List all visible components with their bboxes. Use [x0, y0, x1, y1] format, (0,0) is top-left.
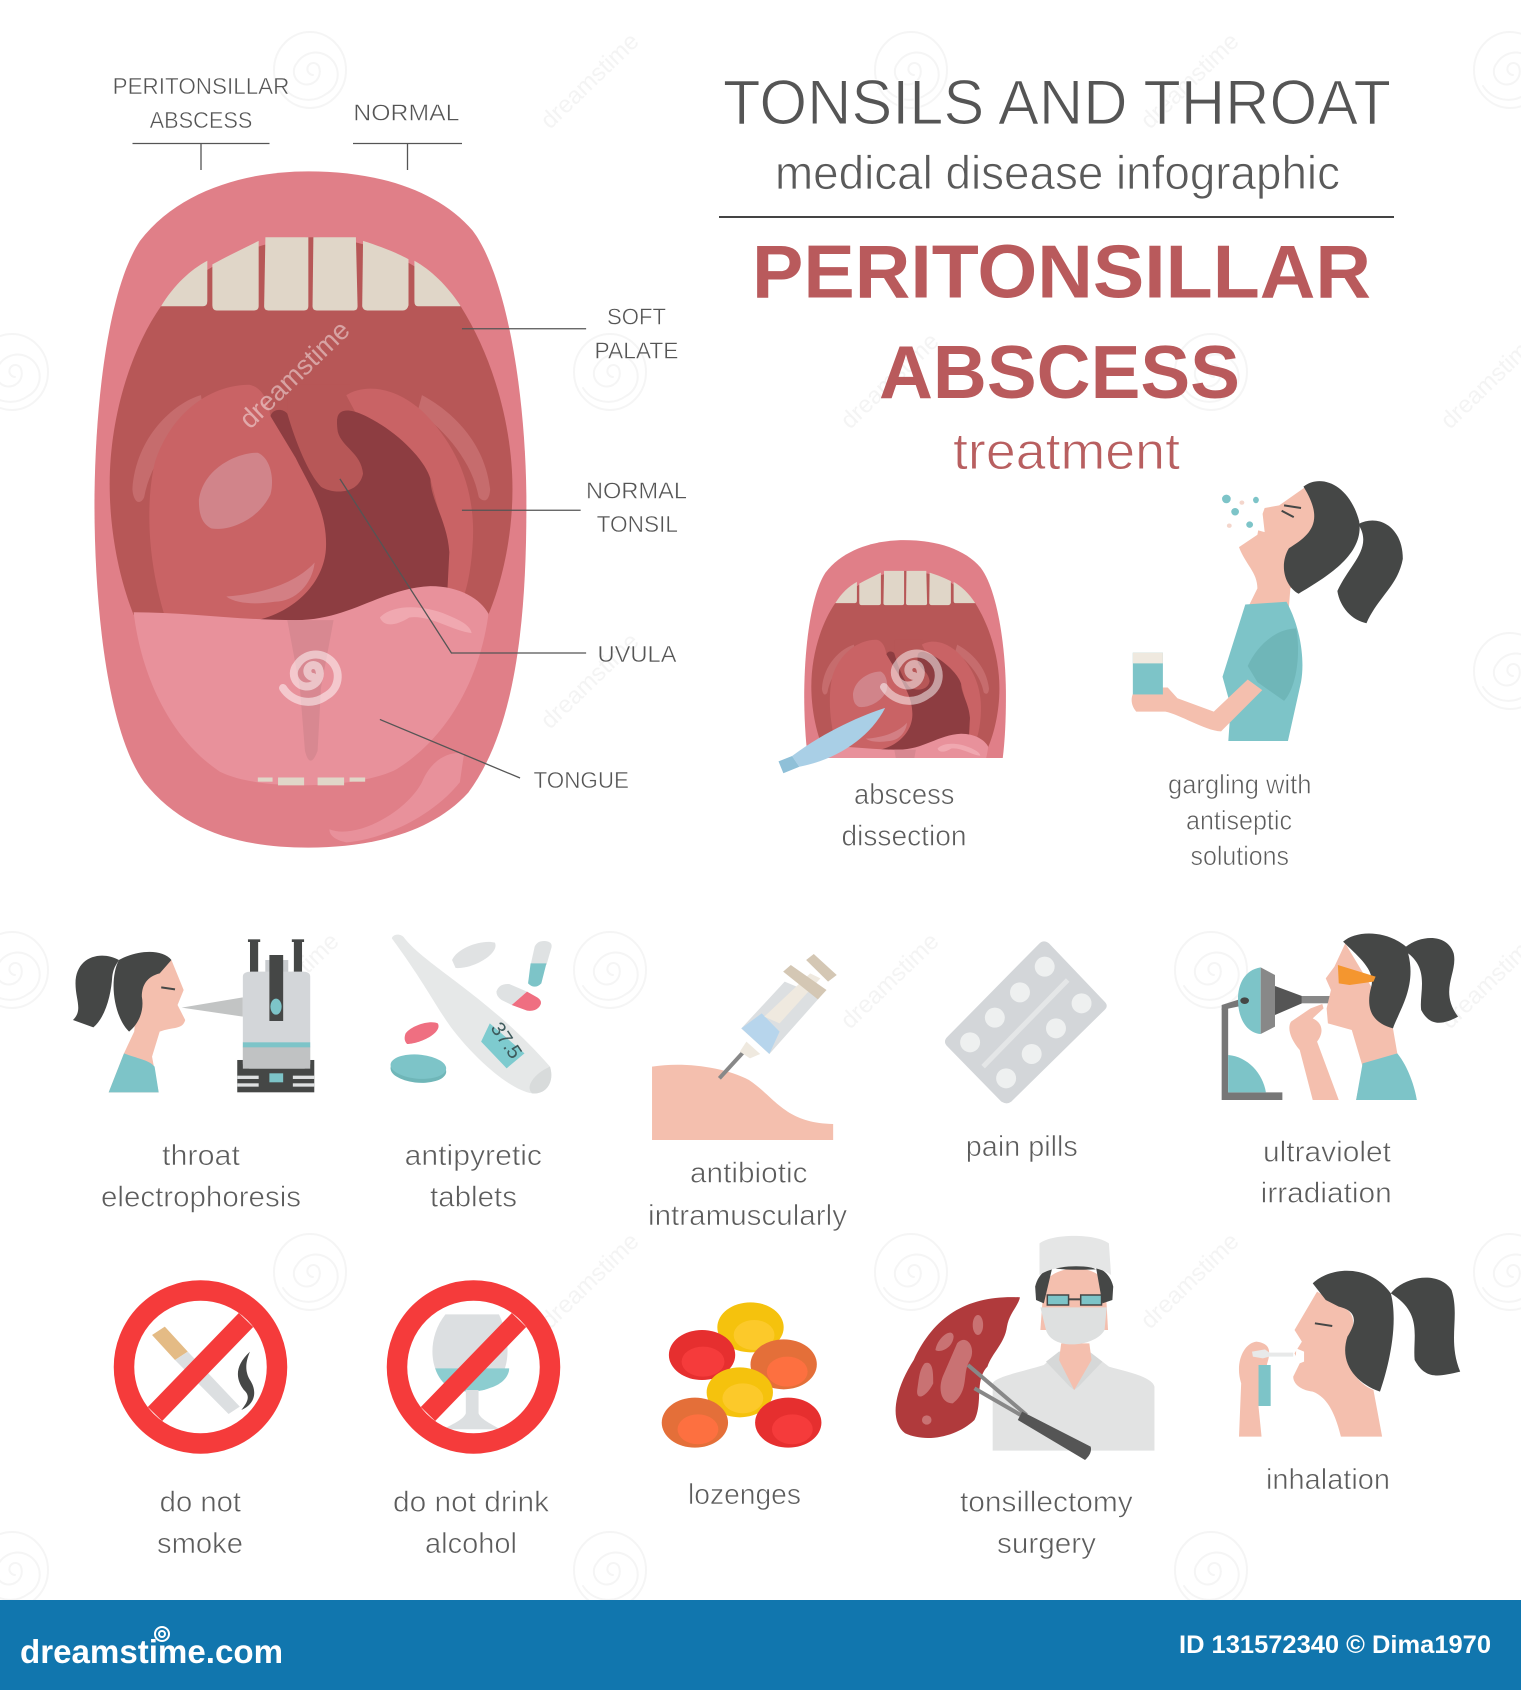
- label: antipyretic tablets: antipyretic: [405, 1140, 542, 1172]
- footer bar: dreamstime.com: [20, 1633, 283, 1670]
- label: antibiotic intramuscularly: antibiotic: [690, 1158, 808, 1190]
- label: tongue: TONGUE: [534, 767, 629, 793]
- label: gargling with antiseptic solutions: solutions: [1190, 841, 1289, 871]
- icon: ultraviolet irradiation: [1222, 933, 1458, 1100]
- title divider: [719, 216, 1394, 218]
- watermark on large mouth: [233, 315, 356, 702]
- icon: no smoking: [124, 1290, 277, 1444]
- icon: thermometer and tablets: 37.5: [486, 1018, 526, 1063]
- label: normal tonsil: NORMAL: [586, 478, 687, 504]
- label: do not smoke: smoke: [157, 1528, 243, 1560]
- label: normal tonsil: TONSIL: [597, 511, 678, 537]
- footer bar: [0, 1600, 1521, 1690]
- label: uvula: UVULA: [598, 641, 677, 667]
- heading: peritonsillar: PERITONSILLAR: [752, 230, 1371, 314]
- label: abscess dissection: abscess: [854, 779, 954, 811]
- icon: antibiotic injection: [652, 954, 837, 1140]
- icon: no alcohol: [397, 1290, 550, 1444]
- label: tonsillectomy surgery: tonsillectomy: [960, 1486, 1133, 1518]
- label: soft palate: PALATE: [594, 338, 678, 364]
- label: soft palate: SOFT: [607, 304, 666, 330]
- icon: inhalation: [1239, 1271, 1460, 1437]
- icon: throat electrophoresis: [73, 939, 314, 1092]
- label: ultraviolet irradiation: irradiation: [1261, 1178, 1392, 1210]
- text: dreamstime: [835, 928, 944, 1034]
- label: antibiotic intramuscularly: intramuscularly: [648, 1200, 848, 1232]
- label: tonsillectomy surgery: surgery: [997, 1528, 1097, 1560]
- label: lozenges: lozenges: [688, 1479, 801, 1511]
- text: dreamstime: [1135, 1228, 1244, 1334]
- label: gargling with antiseptic solutions: gargling with: [1168, 770, 1312, 800]
- icon: pain pills blister: [945, 941, 1107, 1103]
- label: normal: [353, 100, 462, 170]
- label: ultraviolet irradiation: ultraviolet: [1263, 1136, 1391, 1168]
- subtitle: medical disease infographic: [775, 146, 1340, 199]
- title: TONSILS AND THROAT: [723, 68, 1391, 138]
- text: dreamstime: [235, 928, 344, 1034]
- label: gargling with antiseptic solutions: [1168, 770, 1312, 871]
- text: dreamstime: [535, 1228, 644, 1334]
- label: antipyretic tablets: [405, 1140, 542, 1214]
- icon: thermometer and tablets: [387, 935, 552, 1093]
- label leader lines for mouth: [340, 329, 586, 778]
- icon: woman gargling: [1132, 481, 1403, 741]
- label: inhalation: inhalation: [1266, 1464, 1390, 1496]
- icon: lozenges: [662, 1302, 821, 1448]
- label: peritonsillar abscess: [113, 73, 289, 170]
- label: peritonsillar abscess: ABSCESS: [150, 107, 252, 133]
- icon: tonsillectomy surgery: [896, 1236, 1154, 1460]
- label: abscess dissection: [842, 779, 966, 852]
- label: soft palate: [594, 304, 678, 364]
- text: dreamstime: [835, 328, 944, 434]
- heading: treatment: treatment: [953, 423, 1181, 481]
- label: do not drink alcohol: [393, 1486, 550, 1560]
- label: do not drink alcohol: alcohol: [425, 1528, 517, 1560]
- label: normal tonsil: [586, 478, 687, 537]
- label: do not smoke: [157, 1486, 243, 1560]
- label: do not drink alcohol: do not drink: [393, 1486, 550, 1518]
- label: peritonsillar abscess: PERITONSILLAR: [113, 73, 289, 99]
- label: normal: NORMAL: [353, 100, 460, 126]
- icon: abscess dissection: [778, 540, 1006, 774]
- footer bar: ID 131572340 © Dima1970: [1179, 1631, 1491, 1659]
- text: dreamstime: [1135, 28, 1244, 134]
- text: dreamstime: [535, 628, 644, 734]
- watermark on large mouth: dreamstime: [233, 315, 356, 434]
- label: throat electrophoresis: electrophoresis: [101, 1182, 301, 1214]
- label: tonsillectomy surgery: [960, 1486, 1133, 1560]
- label: pain pills: pain pills: [966, 1131, 1078, 1163]
- label: throat electrophoresis: [101, 1140, 301, 1214]
- label: gargling with antiseptic solutions: antiseptic: [1186, 806, 1292, 836]
- label: ultraviolet irradiation: [1261, 1136, 1392, 1210]
- label: antipyretic tablets: tablets: [430, 1182, 517, 1214]
- text: dreamstime: [535, 28, 644, 134]
- label: do not smoke: do not: [160, 1486, 241, 1518]
- label: throat electrophoresis: throat: [162, 1140, 240, 1172]
- heading: abscess: ABSCESS: [879, 330, 1240, 414]
- label: abscess dissection: dissection: [842, 820, 966, 852]
- label: antibiotic intramuscularly: [648, 1158, 848, 1232]
- illustration: open mouth anatomy: [94, 171, 526, 848]
